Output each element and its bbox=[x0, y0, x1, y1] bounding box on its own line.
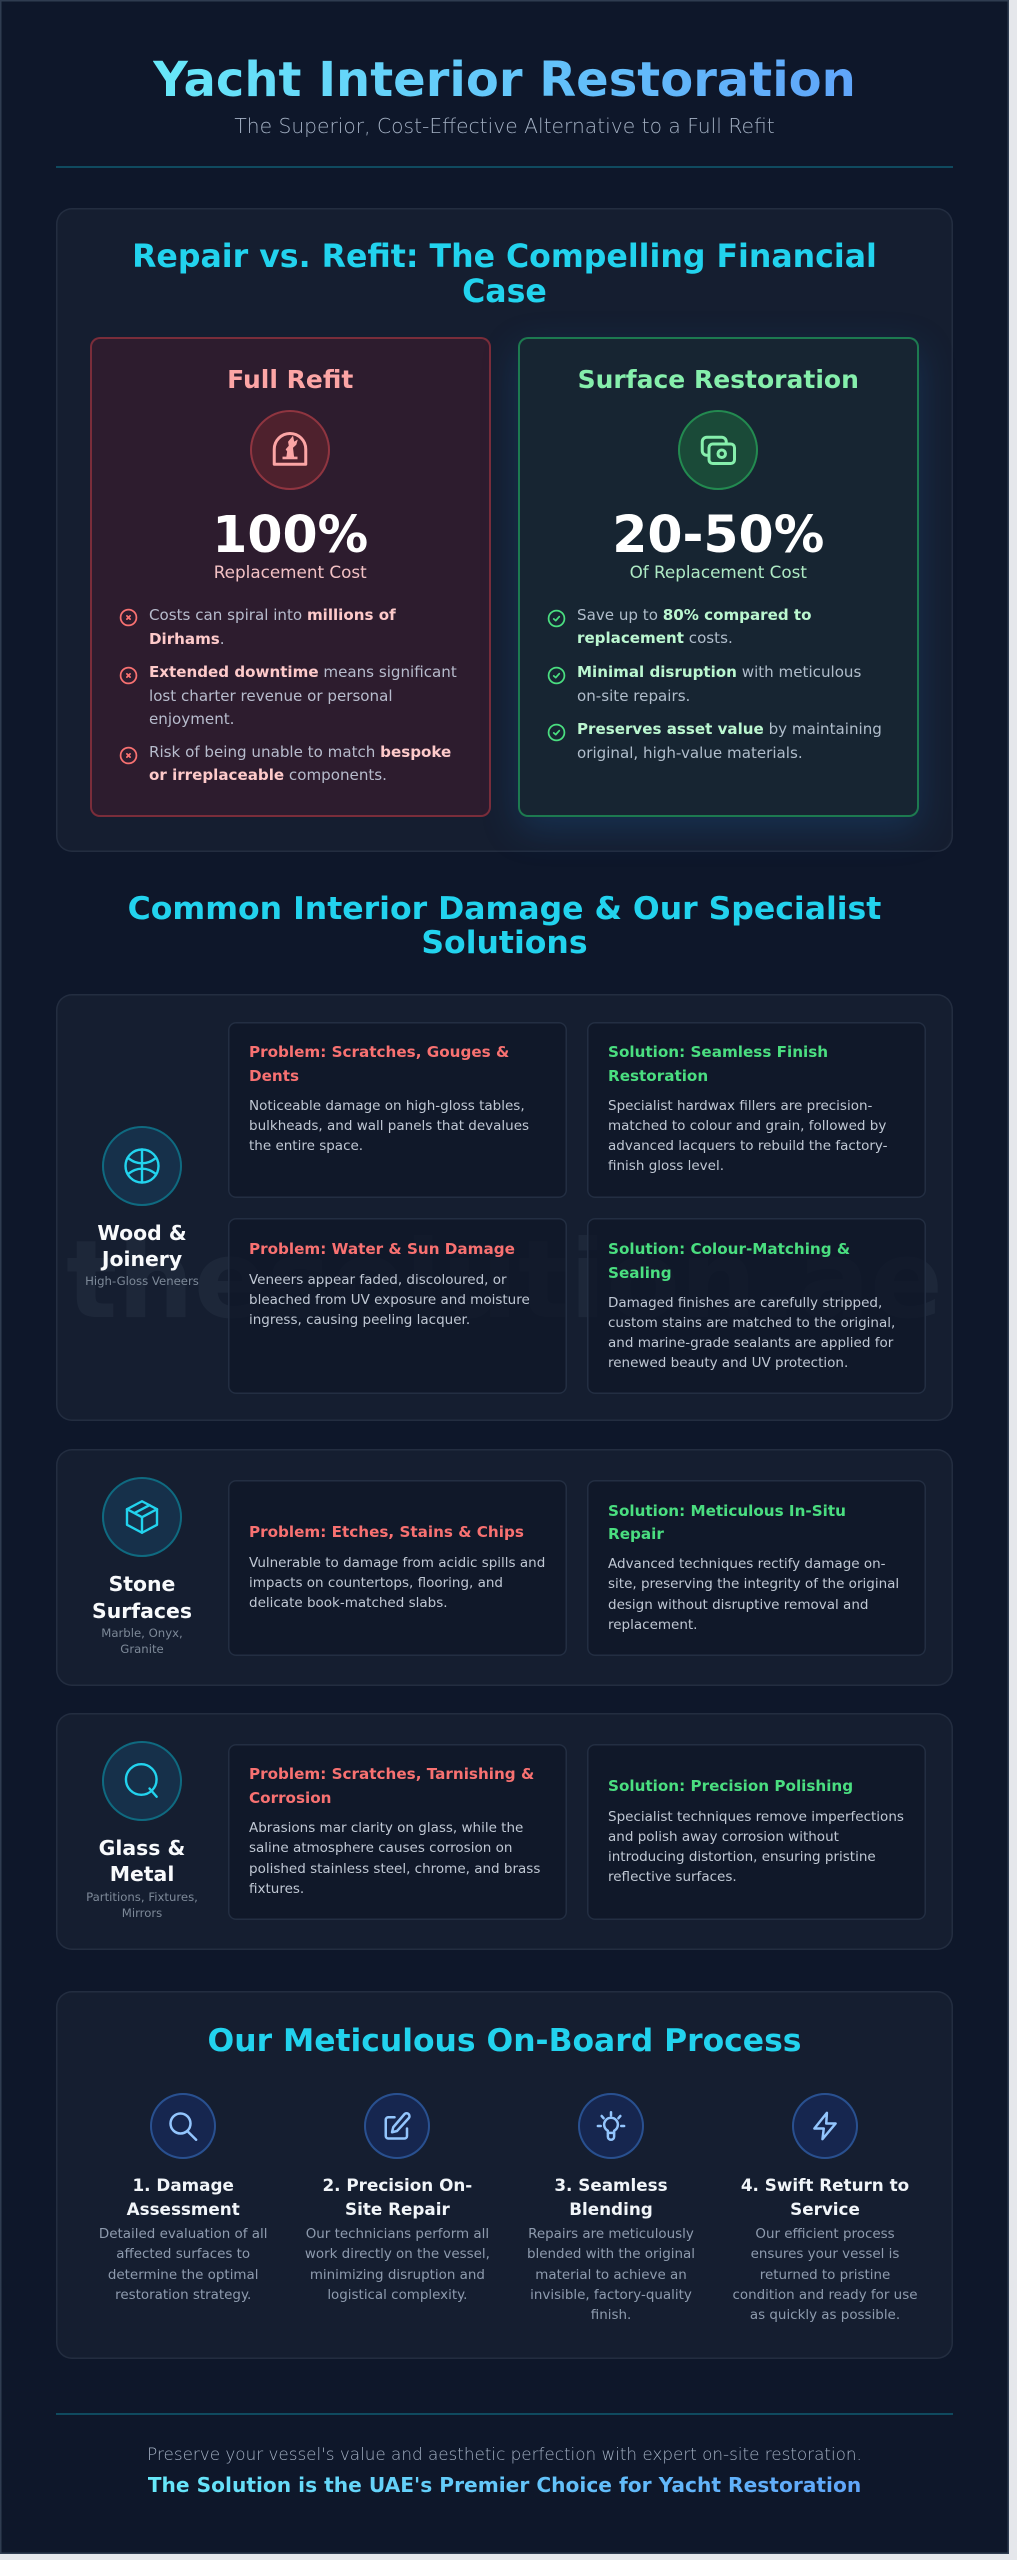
category name: Glass & bbox=[99, 1836, 185, 1860]
problem: tarnishing: Problem: Scratches, Tarnishing & bbox=[249, 1765, 534, 1783]
step 1 bbox=[99, 2093, 267, 2303]
category name: Joinery bbox=[102, 1247, 182, 1271]
category name: Stone bbox=[109, 1572, 175, 1596]
card: surface restoration: on-site repairs. bbox=[577, 686, 690, 704]
icon: basketball grain bbox=[102, 1126, 182, 1206]
solution: in-situ repair: Advanced techniques rectify damage on- bbox=[608, 1556, 886, 1572]
step 3 bbox=[527, 2093, 695, 2323]
category: wood bbox=[85, 1126, 199, 1288]
step 3: blended with the original bbox=[527, 2247, 695, 2262]
problem: tarnishing: fixtures. bbox=[249, 1881, 304, 1897]
bullet: costs: Costs can spiral into millions of bbox=[149, 606, 396, 624]
bullet: costs bbox=[120, 606, 396, 648]
icon: lightning bbox=[792, 2093, 858, 2159]
problem: water and sun bbox=[228, 1218, 566, 1394]
icon: dome bbox=[250, 410, 330, 490]
bullet: bespoke: Risk of being unable to match bespoke bbox=[149, 743, 451, 761]
card: full refit: Dirhams. bbox=[149, 630, 225, 648]
icon: magnifier bbox=[150, 2093, 216, 2159]
problem: water and sun: bleached from UV exposure and moisture bbox=[249, 1292, 530, 1308]
bullet: savings bbox=[548, 606, 812, 647]
problem: tarnishing: Abrasions mar clarity on glass, while the bbox=[249, 1820, 523, 1836]
step 4: Our efficient process bbox=[755, 2227, 895, 2242]
solution: colour matching: Damaged finishes are carefully stripped, bbox=[608, 1295, 882, 1311]
category detail: Mirrors bbox=[122, 1906, 162, 1920]
category detail: Partitions, Fixtures, bbox=[86, 1890, 198, 1904]
heading: common damage: Common Interior Damage & Our Specialist bbox=[128, 891, 881, 927]
problem: water and sun: ingress, causing peeling lacquer. bbox=[249, 1312, 470, 1328]
solution: finish: Restoration bbox=[608, 1067, 708, 1085]
stat label: Replacement Cost bbox=[214, 562, 367, 582]
watermark: thesolution.ae bbox=[66, 1218, 943, 1343]
bullet: downtime: Extended downtime means significant bbox=[149, 663, 457, 681]
solution: colour matching: Sealing bbox=[608, 1264, 672, 1282]
heading: repair vs refit bbox=[132, 239, 877, 310]
step 3: Blending bbox=[569, 2198, 653, 2218]
problem: etches: delicate book-matched slabs. bbox=[249, 1595, 448, 1611]
step 3: Repairs are meticulously bbox=[528, 2227, 694, 2242]
category name: Wood & bbox=[97, 1221, 187, 1245]
card: full refit bbox=[90, 337, 490, 817]
step 3: 3. Seamless bbox=[554, 2175, 668, 2195]
category name: Surfaces bbox=[92, 1599, 192, 1623]
card: full refit: enjoyment. bbox=[149, 710, 234, 728]
subtitle: The Superior, Cost-Effective Alternative to a Full Refit bbox=[234, 114, 775, 138]
step 1: Detailed evaluation of all bbox=[99, 2227, 267, 2242]
problem: scratches bbox=[228, 1022, 566, 1198]
solution: in-situ repair: replacement. bbox=[608, 1617, 697, 1633]
solution: polishing: introducing distortion, ensuring pristine bbox=[608, 1849, 876, 1865]
problem: scratches: Noticeable damage on high-gloss tables, bbox=[249, 1098, 525, 1114]
solution: colour matching: Solution: Colour-Matching & bbox=[608, 1240, 850, 1258]
step 4: ensures your vessel is bbox=[751, 2247, 899, 2262]
heading: common damage bbox=[128, 891, 881, 961]
step 4: condition and ready for use bbox=[732, 2288, 917, 2303]
panel: stone surfaces bbox=[56, 1449, 953, 1686]
category detail: Marble, Onyx, bbox=[101, 1626, 183, 1640]
step 2: logistical complexity. bbox=[327, 2288, 467, 2303]
bullet: asset value: Preserves asset value by maintaining bbox=[577, 720, 882, 738]
panel: wood and joinery bbox=[56, 994, 953, 1421]
step 4: returned to pristine bbox=[760, 2268, 890, 2282]
problem: tarnishing: saline atmosphere causes corrosion on bbox=[249, 1840, 512, 1856]
category name bbox=[97, 1221, 187, 1271]
step 2: 2. Precision On- bbox=[322, 2175, 472, 2195]
problem: tarnishing: Corrosion bbox=[249, 1789, 332, 1807]
solution: in-situ repair: design without disruptive removal and bbox=[608, 1597, 868, 1613]
bullet: downtime bbox=[120, 663, 457, 728]
icon: edit bbox=[364, 2093, 430, 2159]
problem: water and sun: Veneers appear faded, discoloured, or bbox=[249, 1272, 507, 1288]
step 2: Site Repair bbox=[345, 2198, 450, 2218]
problem: etches: impacts on countertops, flooring, and bbox=[249, 1575, 503, 1591]
solution: polishing bbox=[587, 1744, 926, 1920]
step 2 bbox=[305, 2093, 490, 2303]
panel: financial case bbox=[56, 208, 953, 852]
icon: money bbox=[678, 410, 758, 490]
stat: 20-50%: 20-50% bbox=[612, 505, 824, 564]
stat label: Of Replacement Cost bbox=[630, 562, 807, 582]
heading: repair vs refit: Case bbox=[462, 274, 547, 310]
solution: colour matching: and marine-grade sealants are applied for bbox=[608, 1335, 893, 1351]
category: glass bbox=[86, 1741, 198, 1920]
problem: tarnishing: polished stainless steel, chrome, and brass bbox=[249, 1861, 540, 1877]
step 1: determine the optimal bbox=[108, 2268, 258, 2282]
heading: process: Our Meticulous On-Board Process bbox=[208, 2023, 801, 2059]
solution: in-situ repair: site, preserving the integrity of the original bbox=[608, 1576, 899, 1592]
category detail bbox=[86, 1890, 198, 1920]
problem: etches: Vulnerable to damage from acidic spills and bbox=[249, 1555, 545, 1571]
category: stone bbox=[92, 1477, 192, 1656]
solution: polishing: Solution: Precision Polishing bbox=[608, 1777, 853, 1795]
problem: scratches: bulkheads, and wall panels that devalues bbox=[249, 1118, 529, 1134]
bullet: disruption bbox=[548, 663, 861, 704]
solution: finish: Solution: Seamless Finish bbox=[608, 1043, 828, 1061]
bullet: savings: Save up to 80% compared to bbox=[577, 606, 812, 624]
footer bbox=[147, 2444, 862, 2497]
problem: scratches: the entire space. bbox=[249, 1138, 363, 1154]
heading: common damage: Solutions bbox=[421, 925, 588, 961]
card: full refit: lost charter revenue or personal bbox=[149, 687, 393, 705]
step 3: finish. bbox=[591, 2308, 631, 2323]
bullet: disruption: Minimal disruption with meticulous bbox=[577, 663, 861, 681]
step 1: restoration strategy. bbox=[115, 2288, 251, 2303]
step 4: Service bbox=[790, 2198, 860, 2218]
solution: polishing: Specialist techniques remove imperfections bbox=[608, 1809, 904, 1825]
step 4: 4. Swift Return to bbox=[741, 2175, 909, 2195]
solution: finish: finish gloss level. bbox=[608, 1158, 724, 1174]
panel: process bbox=[56, 1991, 953, 2358]
step 1: affected surfaces to bbox=[116, 2247, 250, 2262]
problem: scratches: Dents bbox=[249, 1067, 299, 1085]
footer call to action: The Solution is the UAE's Premier Choice for Yacht Restoration bbox=[148, 2473, 861, 2497]
panel: glass and metal bbox=[56, 1713, 953, 1950]
icon: light bulb bbox=[578, 2093, 644, 2159]
step 4 bbox=[732, 2093, 917, 2323]
problem: etches bbox=[228, 1480, 566, 1656]
category detail bbox=[101, 1626, 183, 1656]
step 1: Assessment bbox=[127, 2198, 240, 2218]
solution: in-situ repair: Solution: Meticulous In-Situ bbox=[608, 1502, 846, 1520]
bullet: asset value bbox=[548, 720, 882, 762]
card: surface restoration: replacement costs. bbox=[577, 629, 733, 647]
category name bbox=[92, 1572, 192, 1623]
title: Yacht Interior Restoration bbox=[153, 52, 856, 108]
step 3: invisible, factory-quality bbox=[530, 2288, 692, 2303]
solution: in-situ repair: Repair bbox=[608, 1525, 664, 1543]
step 2: minimizing disruption and bbox=[310, 2268, 485, 2282]
solution: finish: matched to colour and grain, followed by bbox=[608, 1118, 886, 1134]
bullet: bespoke bbox=[120, 743, 451, 784]
card: full refit: or irreplaceable components. bbox=[149, 766, 387, 784]
step 2: work directly on the vessel, bbox=[305, 2247, 490, 2262]
heading: repair vs refit: Repair vs. Refit: The Compelling Financial bbox=[132, 239, 877, 275]
solution: polishing: reflective surfaces. bbox=[608, 1869, 737, 1885]
problem: water and sun: Problem: Water & Sun Damage bbox=[249, 1240, 515, 1258]
category detail: Granite bbox=[120, 1642, 164, 1656]
category name bbox=[99, 1836, 185, 1886]
solution: colour matching: renewed beauty and UV protection. bbox=[608, 1355, 848, 1371]
card title: Full Refit bbox=[227, 365, 353, 394]
solution: in-situ repair bbox=[587, 1480, 926, 1656]
category name: Metal bbox=[110, 1862, 174, 1886]
step 2: Our technicians perform all bbox=[306, 2227, 489, 2242]
step 3: material to achieve an bbox=[535, 2268, 687, 2282]
solution: colour matching bbox=[587, 1218, 926, 1394]
icon: lens bbox=[102, 1741, 182, 1821]
problem: etches: Problem: Etches, Stains & Chips bbox=[249, 1523, 524, 1541]
solution: polishing: and polish away corrosion without bbox=[608, 1829, 839, 1845]
header bbox=[153, 52, 856, 138]
solution: finish: advanced lacquers to rebuild the factory- bbox=[608, 1138, 888, 1154]
problem: scratches: Problem: Scratches, Gouges & bbox=[249, 1043, 509, 1061]
step 1: 1. Damage bbox=[132, 2175, 234, 2195]
step 4: as quickly as possible. bbox=[750, 2308, 900, 2323]
solution: finish: Specialist hardwax fillers are precision- bbox=[608, 1098, 872, 1114]
card title: Surface Restoration bbox=[578, 365, 859, 394]
solution: finish bbox=[587, 1022, 926, 1198]
card: surface restoration: original, high-value materials. bbox=[577, 744, 803, 762]
stat: 100%: 100% bbox=[212, 505, 368, 564]
category detail: High-Gloss Veneers bbox=[85, 1274, 199, 1288]
solution: colour matching: custom stains are matched to the original, bbox=[608, 1315, 895, 1331]
problem: tarnishing bbox=[228, 1744, 566, 1920]
card: surface restoration bbox=[518, 337, 918, 817]
footer tagline: Preserve your vessel's value and aesthetic perfection with expert on-site restoration. bbox=[147, 2444, 862, 2464]
icon: cube bbox=[102, 1477, 182, 1557]
